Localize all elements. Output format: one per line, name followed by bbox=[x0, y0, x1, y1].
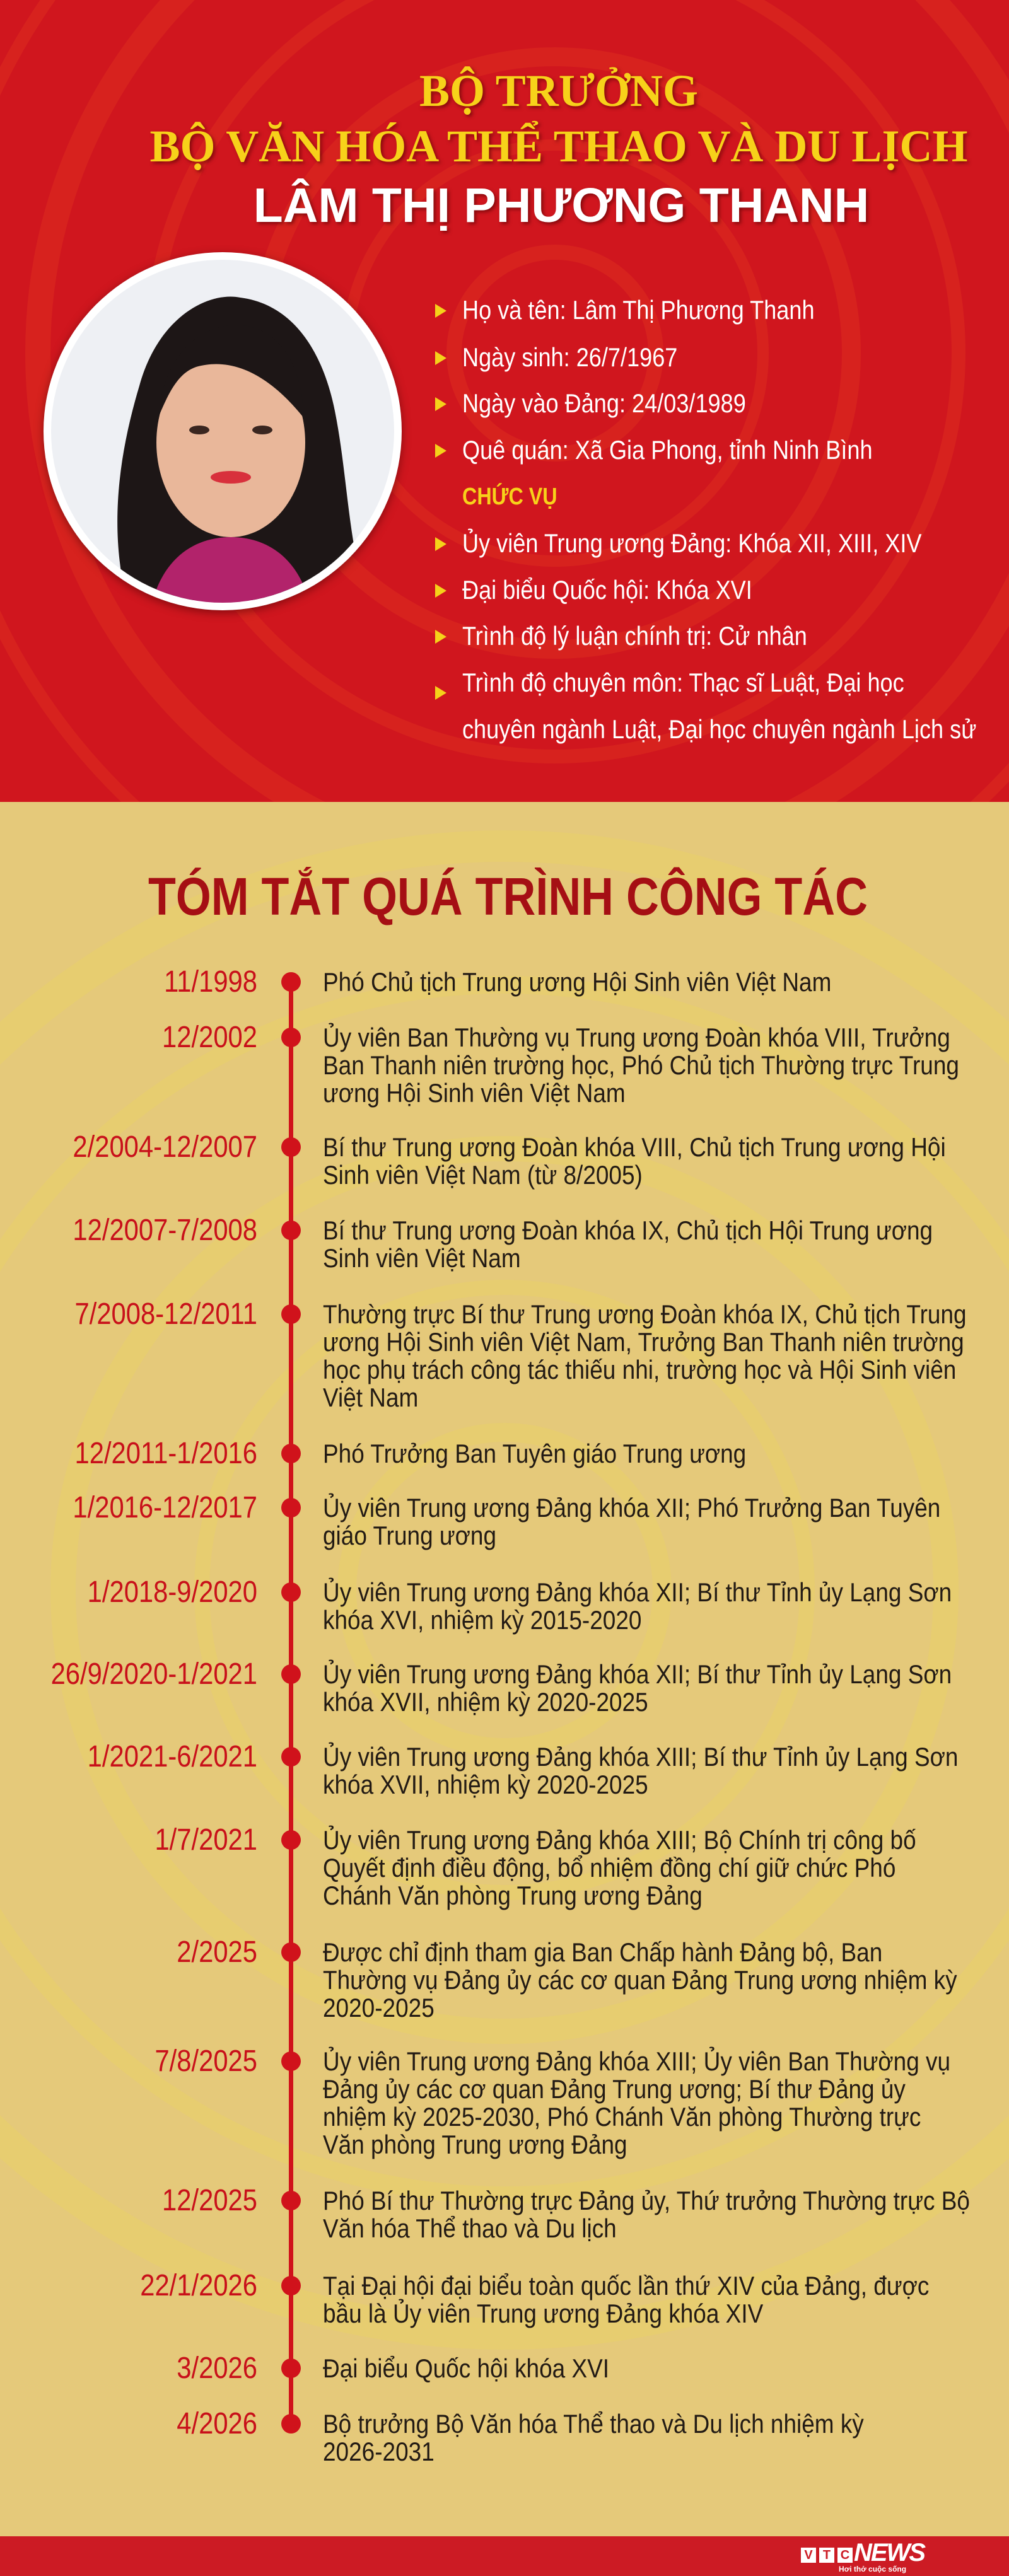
bullet: central committee: Ủy viên Trung ương Đảng: Khóa XII, XIII, XIV bbox=[462, 528, 921, 558]
timeline item 1/2016-12/2017: 1/2016-12/2017 bbox=[73, 1491, 257, 1524]
timeline item 2/2025 bbox=[177, 1935, 957, 2022]
timeline item 2/2025: Thường vụ Đảng ủy các cơ quan Đảng Trung ương nhiệm kỳ bbox=[323, 1965, 957, 1995]
timeline item 1/2018-9/2020 bbox=[88, 1575, 952, 1635]
timeline item 12/2002: 12/2002 bbox=[162, 1021, 257, 1054]
timeline item 12/2007-7/2008: 12/2007-7/2008 bbox=[73, 1214, 257, 1247]
timeline item 2/2025: 2/2025 bbox=[177, 1935, 257, 1969]
timeline item 1/7/2021: Ủy viên Trung ương Đảng khóa XIII; Bộ Chính trị công bố bbox=[323, 1825, 916, 1855]
bullet: name: Họ và tên: Lâm Thị Phương Thanh bbox=[462, 295, 815, 325]
section title: TÓM TẮT QUÁ TRÌNH CÔNG TÁC bbox=[148, 867, 868, 926]
timeline bbox=[289, 991, 293, 2415]
timeline item 7/2008-12/2011: ương Hội Sinh viên Việt Nam, Trưởng Ban Thanh niên trường bbox=[323, 1327, 964, 1357]
timeline item 12/2002: Ban Thanh niên trường học, Phó Chủ tịch Thường trực Trung bbox=[323, 1050, 959, 1080]
timeline item 3/2026: Đại biểu Quốc hội khóa XVI bbox=[323, 2353, 609, 2383]
title bbox=[150, 66, 970, 235]
logo: VTC News: NEWS bbox=[854, 2539, 924, 2567]
timeline item 7/8/2025 bbox=[155, 2045, 950, 2159]
timeline item 7/8/2025: Đảng ủy các cơ quan Đảng Trung ương; Bí thư Đảng ủy bbox=[323, 2074, 906, 2104]
timeline item 1/2021-6/2021 bbox=[88, 1740, 958, 1799]
timeline item 11/1998 bbox=[164, 965, 831, 999]
timeline item 12/2025: Phó Bí thư Thường trực Đảng ủy, Thứ trưởng Thường trực Bộ bbox=[323, 2186, 970, 2215]
heading: chức vụ: CHỨC VỤ bbox=[462, 484, 557, 510]
logo: VTC News: T bbox=[823, 2548, 831, 2562]
timeline item 12/2002: Ủy viên Ban Thường vụ Trung ương Đoàn khóa VIII, Trưởng bbox=[323, 1023, 950, 1052]
yellow background pattern bbox=[0, 830, 1009, 2350]
footer band bbox=[0, 2536, 1009, 2576]
timeline item 2/2004-12/2007: Bí thư Trung ương Đoàn khóa VIII, Chủ tịch Trung ương Hội bbox=[323, 1132, 946, 1162]
info list bbox=[435, 295, 976, 744]
timeline item 12/2007-7/2008: Bí thư Trung ương Đoàn khóa IX, Chủ tịch Hội Trung ương bbox=[323, 1215, 933, 1245]
timeline item 1/7/2021: 1/7/2021 bbox=[155, 1823, 257, 1857]
timeline item 4/2026: Bộ trưởng Bộ Văn hóa Thể thao và Du lịch nhiệm kỳ bbox=[323, 2409, 864, 2439]
timeline item 7/2008-12/2011: Thường trực Bí thư Trung ương Đoàn khóa IX, Chủ tịch Trung bbox=[323, 1299, 967, 1329]
timeline item 3/2026: 3/2026 bbox=[177, 2352, 257, 2385]
timeline item 7/8/2025: nhiệm kỳ 2025-2030, Phó Chánh Văn phòng Thường trực bbox=[323, 2102, 921, 2132]
timeline item 1/2018-9/2020: 1/2018-9/2020 bbox=[88, 1575, 257, 1609]
timeline item 12/2025: Văn hóa Thể thao và Du lịch bbox=[323, 2213, 617, 2243]
timeline item 2/2004-12/2007 bbox=[73, 1130, 946, 1190]
timeline item 4/2026: 2026-2031 bbox=[323, 2437, 435, 2466]
bullet: expertise: Trình độ chuyên môn: Thạc sĩ Luật, Đại học bbox=[462, 668, 904, 697]
timeline item 1/2021-6/2021: khóa XVII, nhiệm kỳ 2020-2025 bbox=[323, 1770, 648, 1799]
timeline item 7/8/2025: 7/8/2025 bbox=[155, 2045, 257, 2078]
timeline item 7/2008-12/2011: học phụ trách công tác thiếu nhi, trường học và Hội Sinh viên bbox=[323, 1355, 956, 1384]
timeline item 26/9/2020-1/2021: 26/9/2020-1/2021 bbox=[51, 1657, 257, 1691]
timeline item 22/1/2026: 22/1/2026 bbox=[140, 2269, 257, 2302]
timeline item 11/1998: Phó Chủ tịch Trung ương Hội Sinh viên Việt Nam bbox=[323, 967, 831, 997]
timeline item 1/7/2021: Quyết định điều động, bổ nhiệm đồng chí giữ chức Phó bbox=[323, 1853, 895, 1883]
timeline item 22/1/2026 bbox=[140, 2269, 929, 2328]
timeline item 7/8/2025: Văn phòng Trung ương Đảng bbox=[323, 2130, 627, 2159]
bullet: expertise: chuyên ngành Luật, Đại học chuyên ngành Lịch sử bbox=[462, 714, 976, 744]
bullet: party date: Ngày vào Đảng: 24/03/1989 bbox=[462, 388, 746, 418]
timeline item 7/2008-12/2011: Việt Nam bbox=[323, 1383, 418, 1412]
timeline item 12/2011-1/2016: 12/2011-1/2016 bbox=[75, 1437, 257, 1470]
timeline item 4/2026: 4/2026 bbox=[177, 2407, 257, 2440]
timeline item 12/2002 bbox=[162, 1021, 959, 1108]
logo: VTC News: Hơi thở cuộc sống bbox=[839, 2565, 906, 2573]
timeline item 12/2002: ương Hội Sinh viên Việt Nam bbox=[323, 1078, 626, 1108]
timeline item 1/2021-6/2021: Ủy viên Trung ương Đảng khóa XIII; Bí thư Tỉnh ủy Lạng Sơn bbox=[323, 1742, 958, 1772]
logo: VTC News: V bbox=[804, 2548, 813, 2562]
timeline item 7/8/2025: Ủy viên Trung ương Đảng khóa XIII; Ủy viên Ban Thường vụ bbox=[323, 2046, 950, 2076]
bullet: birth date: Ngày sinh: 26/7/1967 bbox=[462, 342, 677, 372]
timeline item 26/9/2020-1/2021: Ủy viên Trung ương Đảng khóa XII; Bí thư Tỉnh ủy Lạng Sơn bbox=[323, 1659, 952, 1689]
timeline item 1/2016-12/2017: giáo Trung ương bbox=[323, 1521, 496, 1550]
timeline item 1/2021-6/2021: 1/2021-6/2021 bbox=[88, 1740, 257, 1773]
timeline item 1/2018-9/2020: Ủy viên Trung ương Đảng khóa XII; Bí thư Tỉnh ủy Lạng Sơn bbox=[323, 1577, 952, 1607]
bullet: national assembly: Đại biểu Quốc hội: Khóa XVI bbox=[462, 575, 752, 605]
title: BỘ VĂN HÓA THỂ THAO VÀ DU LỊCH bbox=[150, 121, 967, 171]
timeline item 1/2018-9/2020: khóa XVI, nhiệm kỳ 2015-2020 bbox=[323, 1605, 641, 1635]
portrait photo bbox=[44, 252, 402, 610]
timeline item 7/2008-12/2011 bbox=[75, 1297, 967, 1412]
timeline item 2/2004-12/2007: Sinh viên Việt Nam (từ 8/2005) bbox=[323, 1160, 643, 1190]
timeline item 12/2007-7/2008 bbox=[73, 1214, 933, 1273]
timeline item 1/2016-12/2017 bbox=[73, 1491, 940, 1550]
bullet: political theory: Trình độ lý luận chính trị: Cử nhân bbox=[462, 621, 807, 651]
timeline item 7/2008-12/2011: 7/2008-12/2011 bbox=[75, 1297, 257, 1331]
header panel: red background with drum pattern bbox=[0, 0, 1009, 802]
timeline item 1/7/2021 bbox=[155, 1823, 916, 1910]
title: BỘ TRƯỞNG bbox=[419, 66, 698, 116]
bullet: expertise bbox=[435, 668, 976, 744]
timeline item 12/2025 bbox=[162, 2184, 970, 2243]
logo: VTC News bbox=[801, 2539, 926, 2573]
timeline item 1/7/2021: Chánh Văn phòng Trung ương Đảng bbox=[323, 1881, 703, 1910]
timeline item 12/2011-1/2016 bbox=[75, 1437, 746, 1470]
timeline item 2/2025: 2020-2025 bbox=[323, 1993, 435, 2022]
timeline item 12/2011-1/2016: Phó Trưởng Ban Tuyên giáo Trung ương bbox=[323, 1439, 746, 1468]
bullet: hometown: Quê quán: Xã Gia Phong, tỉnh Ninh Bình bbox=[462, 435, 873, 465]
timeline item 22/1/2026: bầu là Ủy viên Trung ương Đảng khóa XIV bbox=[323, 2299, 763, 2328]
title: LÂM THỊ PHƯƠNG THANH bbox=[254, 178, 869, 233]
timeline item 26/9/2020-1/2021 bbox=[51, 1657, 952, 1717]
timeline item 1/2016-12/2017: Ủy viên Trung ương Đảng khóa XII; Phó Trưởng Ban Tuyên bbox=[323, 1493, 940, 1523]
timeline item 12/2025: 12/2025 bbox=[162, 2184, 257, 2217]
timeline item 2/2025: Được chỉ định tham gia Ban Chấp hành Đảng bộ, Ban bbox=[323, 1937, 882, 1967]
timeline item 2/2004-12/2007: 2/2004-12/2007 bbox=[73, 1130, 257, 1164]
timeline item 12/2007-7/2008: Sinh viên Việt Nam bbox=[323, 1243, 521, 1273]
timeline item 11/1998: 11/1998 bbox=[164, 965, 257, 999]
timeline item 22/1/2026: Tại Đại hội đại biểu toàn quốc lần thứ XIV của Đảng, được bbox=[323, 2271, 929, 2300]
logo: VTC News: C bbox=[841, 2548, 849, 2562]
timeline item 4/2026 bbox=[177, 2407, 864, 2466]
timeline item 26/9/2020-1/2021: khóa XVII, nhiệm kỳ 2020-2025 bbox=[323, 1687, 648, 1717]
timeline item 3/2026 bbox=[177, 2352, 609, 2385]
